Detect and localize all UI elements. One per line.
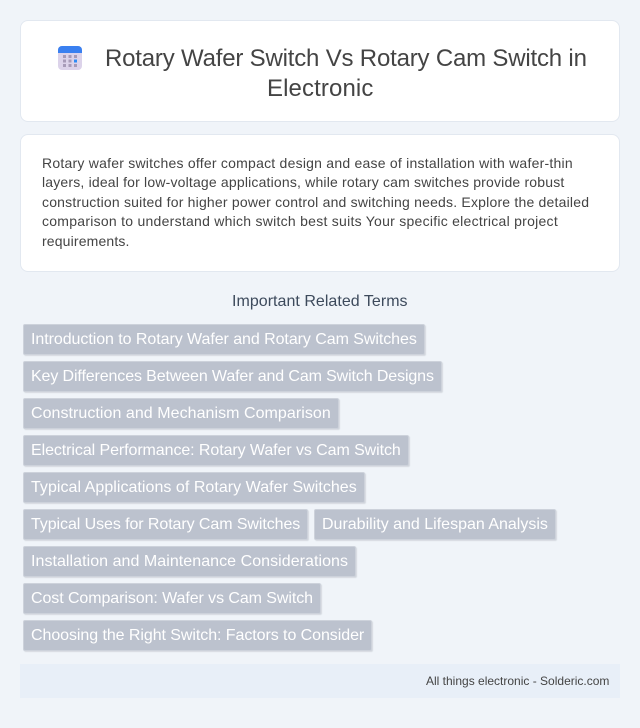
footer <box>20 664 620 698</box>
tag: Electrical Performance: Rotary Wafer vs Cam Switch <box>31 442 401 459</box>
tag: Typical Applications of Rotary Wafer Switches <box>31 479 357 496</box>
heading: Electronic <box>267 75 373 102</box>
heading: related terms: Important Related Terms <box>232 293 408 310</box>
panel: title card <box>20 20 620 122</box>
tag: Choosing the Right Switch: Factors to Consider <box>31 627 364 644</box>
tag <box>23 361 442 392</box>
heading: Rotary Wafer Switch Vs Rotary Cam Switch in <box>105 45 587 72</box>
tag: Installation and Maintenance Considerations <box>31 553 348 570</box>
tag <box>23 472 365 503</box>
tag <box>23 324 425 355</box>
icon: calendar <box>58 46 82 70</box>
tag: Key Differences Between Wafer and Cam Switch Designs <box>31 368 434 385</box>
tag <box>23 435 409 466</box>
tag: Cost Comparison: Wafer vs Cam Switch <box>31 590 313 607</box>
tag: Construction and Mechanism Comparison <box>31 405 331 422</box>
text block: description: Rotary wafer switches offer compact design and ease of installation with wafer-thin <box>42 155 573 171</box>
tag list <box>23 324 557 652</box>
tag <box>23 583 321 614</box>
footer text: All things electronic - Solderic.com <box>426 674 609 688</box>
text block: description: construction suited for higher power control and switching needs. Explore the detailed <box>42 194 589 210</box>
tag <box>23 509 308 540</box>
heading <box>105 45 587 102</box>
text block: description <box>42 155 589 249</box>
text block: description: requirements. <box>42 233 130 249</box>
tag: Typical Uses for Rotary Cam Switches <box>31 516 300 533</box>
tag: Introduction to Rotary Wafer and Rotary Cam Switches <box>31 331 417 348</box>
text block: description: comparison to understand which switch best suits Your specific electrical project <box>42 213 558 229</box>
tag <box>23 398 339 429</box>
panel: description <box>20 134 620 272</box>
tag <box>23 546 356 577</box>
tag: Durability and Lifespan Analysis <box>322 516 548 533</box>
text block: description: layers, ideal for low-voltage applications, while rotary cam switches provide robust <box>42 174 564 190</box>
tag <box>23 620 372 651</box>
tag <box>314 509 556 540</box>
